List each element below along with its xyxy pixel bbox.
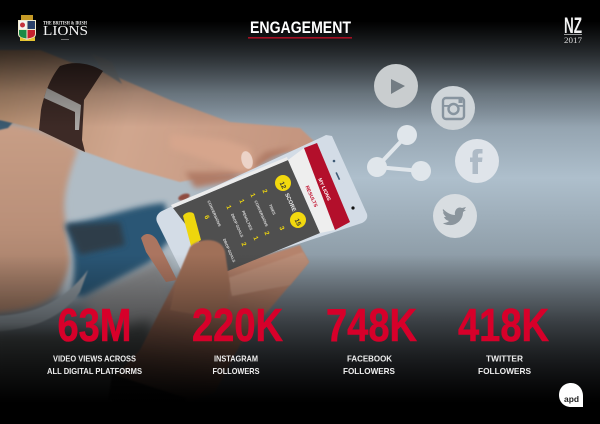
small blue patch at left edge [0,119,14,131]
icon: play [374,64,418,108]
index finger [170,134,254,172]
phone screen: 6 [202,214,210,221]
phone screen: 2 [262,230,270,237]
phone screen: TRIES [268,204,276,216]
stat: facebook [326,299,417,376]
stat: twitter: FOLLOWERS [478,366,531,376]
phone screen: 2 [260,188,268,195]
logo: apd [559,383,583,407]
phone screen: DROP GOALS [222,238,236,263]
phone body [156,135,367,279]
phone screen: 1 [224,204,232,211]
palm shadow beneath the index finger [185,146,296,188]
phone screen: 12 [278,181,287,190]
lower finger [141,234,177,282]
fingers under the phone edge [228,252,309,296]
phone screen [171,143,350,273]
phone screen: 15 [293,218,302,227]
phone screen: 1 [237,198,245,205]
stat: video views: VIDEO VIEWS ACROSS [53,354,136,364]
phone screen: 3 [277,225,285,232]
pale floor behind the knee [60,140,200,300]
crest [18,15,36,41]
logo: British and Irish Lions: THE BRITISH & IRISH [43,22,87,26]
red fingertip [177,192,191,202]
NZ 2017 mark [564,13,582,45]
leather watch strap [39,63,103,152]
icon: instagram [431,86,475,130]
phone screen: 1 [248,192,256,199]
stat: facebook: FACEBOOK [347,354,393,364]
watch buckle [44,88,81,130]
icon: twitter [433,194,477,238]
bare knee [0,123,78,314]
logo: British and Irish Lions [18,15,88,41]
phone screen: CONVERSIONS [206,200,222,228]
stat: instagram: INSTAGRAM [214,354,258,364]
floor below the shorts [85,255,180,350]
NZ 2017 mark: 2017 [564,35,582,45]
phone screen: MY LIONS [316,177,332,202]
stat: instagram: FOLLOWERS [212,366,260,376]
fingernail [239,150,255,170]
phone screen: DROP GOALS [230,213,244,238]
phone screen: 1 [251,235,259,242]
phone screen: PENALTIES [241,210,253,231]
logo: British and Irish Lions: LIONS [43,24,88,39]
stat: facebook: FOLLOWERS [343,366,395,376]
stat: twitter: 418K [458,299,549,351]
stat: twitter [458,299,549,376]
phone screen: SCORE [283,192,297,213]
icon: share [367,125,431,181]
phone screen: CONVERSIONS [253,200,269,228]
watch metal behind the wrist [92,54,122,84]
thumb over the phone [170,240,230,320]
stat: twitter: TWITTER [486,354,523,364]
stat: instagram [192,299,283,376]
stat: facebook: 748K [326,299,417,351]
logo: apd: apd [564,394,579,404]
phone screen: 2 [239,241,247,248]
icon: facebook [455,139,499,183]
NZ 2017 mark: NZ [564,13,582,38]
denim shorts [65,203,170,297]
stat: video views: ALL DIGITAL PLATFORMS [47,366,142,376]
cuff of shorts [0,270,88,332]
upper hand and forearm [0,50,318,182]
title: Engagement: ENGAGEMENT [250,19,351,37]
phone screen: RESULTS [304,185,319,209]
lower hand and wrist [113,245,309,410]
stat: video views [47,299,142,376]
stat: video views: 63M [58,299,132,351]
phone camera and speaker [333,160,355,210]
watch band on lower wrist [108,374,186,424]
stat: instagram: 220K [192,299,283,351]
